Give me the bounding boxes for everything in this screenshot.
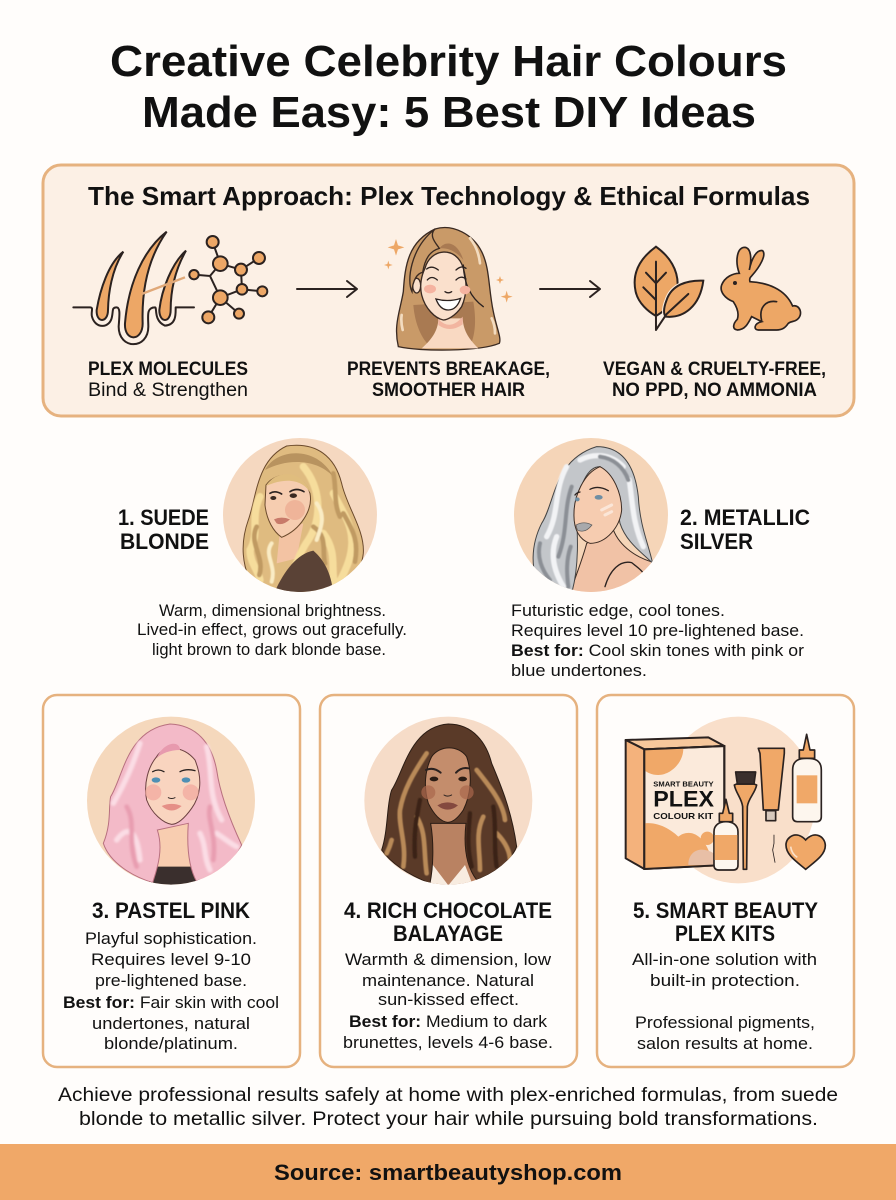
source footer band: Source: smartbeautyshop.com (274, 1160, 622, 1185)
card title (633, 898, 818, 946)
card: rich chocolate balayage (320, 695, 577, 1067)
text: suede blonde description (137, 601, 407, 659)
card body: sun-kissed effect. (378, 990, 519, 1009)
card body: All-in-one solution with (632, 950, 817, 969)
closing summary text (58, 1085, 838, 1130)
card title: 5. SMART BEAUTY (633, 898, 818, 923)
label: vegan and cruelty-free: VEGAN & CRUELTY-FREE, (603, 359, 826, 380)
label: vegan and cruelty-free (603, 359, 826, 401)
text: metallic silver description: Requires level 10 pre-lightened base. (511, 621, 804, 640)
kit box (626, 737, 724, 869)
sparkles (384, 239, 513, 303)
card body: Best for: Fair skin with cool (63, 993, 279, 1012)
icon: rabbit (721, 247, 801, 330)
card body: blonde/platinum. (104, 1034, 238, 1053)
card: pastel pink (43, 695, 300, 1067)
card body (343, 950, 553, 1052)
text: suede blonde description: Lived-in effect, grows out gracefully. (137, 620, 407, 639)
closing summary text: Achieve professional results safely at home with plex-enriched formulas, from suede (58, 1085, 838, 1106)
card title (344, 898, 552, 946)
card body: Warmth & dimension, low (345, 950, 552, 969)
card body: Playful sophistication. (85, 929, 257, 948)
title: Creative Celebrity Hair Colours (110, 37, 787, 86)
text: suede blonde description: Warm, dimensional brightness. (159, 601, 386, 620)
portrait: rich chocolate (364, 717, 532, 887)
icon: hair follicles (73, 232, 194, 344)
portrait: suede blonde (223, 438, 377, 595)
panel heading: The Smart Approach: Plex Technology & Ethical Formulas (88, 181, 810, 211)
arrow 1 (297, 281, 357, 297)
text: metallic silver description: Best for: Cool skin tones with pink or (511, 641, 804, 660)
illustration: plex colour kit (626, 717, 825, 883)
card body: Professional pigments, (635, 1013, 815, 1032)
text: suede blonde description: light brown to dark blonde base. (152, 640, 386, 659)
small bottle (714, 799, 738, 870)
title: Made Easy: 5 Best DIY Ideas (142, 88, 756, 137)
card body: Best for: Medium to dark (349, 1012, 548, 1031)
heart (786, 835, 825, 869)
card: smart beauty plex kits (597, 695, 854, 1067)
card body (63, 929, 279, 1053)
label: plex molecules (88, 359, 248, 401)
title (110, 37, 787, 137)
heading: metallic silver: SILVER (680, 529, 753, 554)
card body: built-in protection. (650, 971, 800, 990)
card title: 4. RICH CHOCOLATE (344, 898, 552, 923)
arrow 2 (540, 281, 600, 297)
icon: happy woman (384, 228, 513, 350)
icon: leaves (635, 247, 703, 330)
large bottle (793, 734, 821, 822)
card body: undertones, natural (92, 1014, 250, 1033)
tube (758, 748, 784, 821)
card title: BALAYAGE (393, 921, 503, 946)
card body: Requires level 9-10 (91, 950, 251, 969)
card body (632, 950, 817, 1053)
section: metallic silver (511, 438, 810, 680)
card title: 3. PASTEL PINK (92, 898, 250, 923)
section: suede blonde (118, 438, 407, 659)
portrait: pastel pink (87, 717, 255, 887)
illustration: plex colour kit: PLEX (653, 787, 714, 812)
icon: plex molecule (189, 236, 267, 323)
heading: suede blonde: BLONDE (120, 529, 209, 554)
closing summary text: blonde to metallic silver. Protect your hair while pursuing bold transformations. (79, 1109, 818, 1130)
label: plex molecules: PLEX MOLECULES (88, 359, 248, 380)
label: prevents breakage (347, 359, 550, 401)
card body: maintenance. Natural (362, 971, 534, 990)
tint brush (734, 772, 757, 869)
text: metallic silver description: Futuristic edge, cool tones. (511, 601, 725, 620)
heading: suede blonde: 1. SUEDE (118, 505, 209, 530)
card body: salon results at home. (637, 1034, 813, 1053)
label: plex molecules: Bind & Strengthen (88, 380, 248, 401)
text: metallic silver description (511, 601, 804, 680)
illustration: plex colour kit: SMART BEAUTY (653, 782, 714, 789)
text: metallic silver description: blue undertones. (511, 661, 647, 680)
illustration: plex colour kit: COLOUR KIT (653, 811, 713, 821)
heading: metallic silver: 2. METALLIC (680, 505, 810, 530)
heading: metallic silver (680, 505, 810, 554)
card title: PLEX KITS (675, 921, 775, 946)
heading: suede blonde (118, 505, 209, 554)
card body: pre-lightened base. (95, 971, 247, 990)
label: prevents breakage: PREVENTS BREAKAGE, (347, 359, 550, 380)
source footer band (0, 1144, 896, 1200)
label: prevents breakage: SMOOTHER HAIR (372, 380, 525, 401)
portrait: metallic silver (514, 438, 668, 597)
label: vegan and cruelty-free: NO PPD, NO AMMONIA (612, 380, 817, 401)
card body: brunettes, levels 4-6 base. (343, 1033, 553, 1052)
panel: smart approach (43, 165, 854, 416)
